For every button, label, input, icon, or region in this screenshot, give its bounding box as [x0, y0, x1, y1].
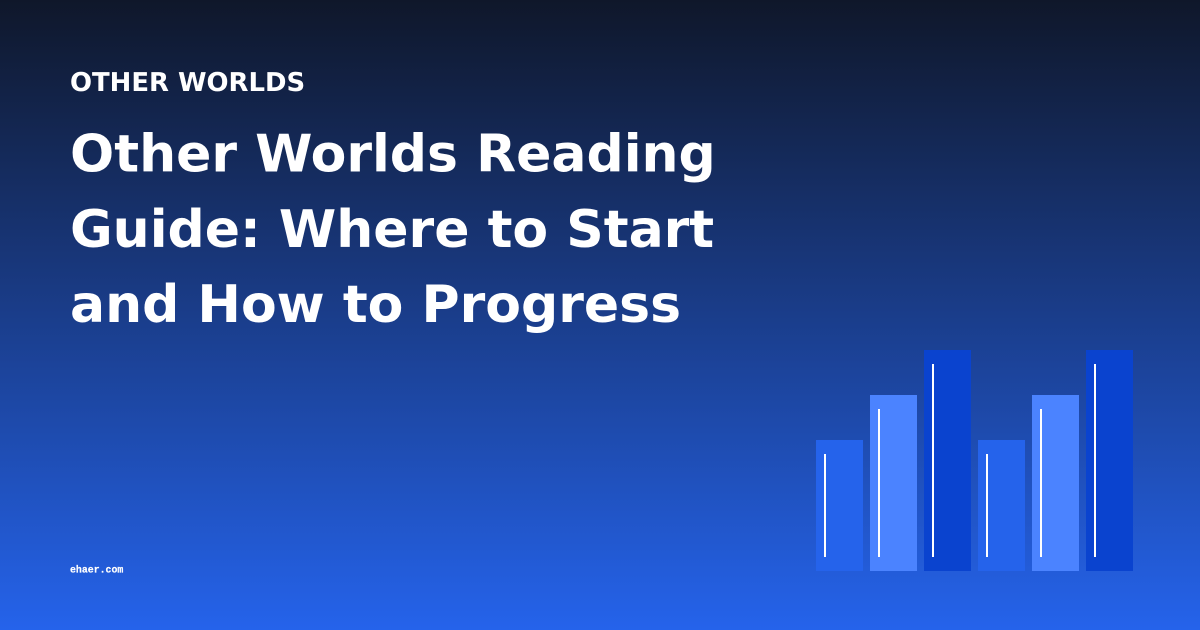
bar 6	[1086, 350, 1133, 571]
title: and How to Progress	[70, 275, 681, 335]
title: Other Worlds Reading	[70, 124, 716, 184]
bar 4	[978, 440, 1025, 571]
bar 2	[870, 395, 917, 571]
title: Guide: Where to Start	[70, 200, 714, 260]
bar 5	[1032, 395, 1079, 571]
footer domain: ehaer.com	[70, 564, 123, 576]
bar graphic	[816, 350, 1133, 571]
title	[70, 124, 716, 335]
bar 1	[816, 440, 863, 571]
kicker: other worlds: OTHER WORLDS	[70, 68, 305, 98]
bar 3	[924, 350, 971, 571]
